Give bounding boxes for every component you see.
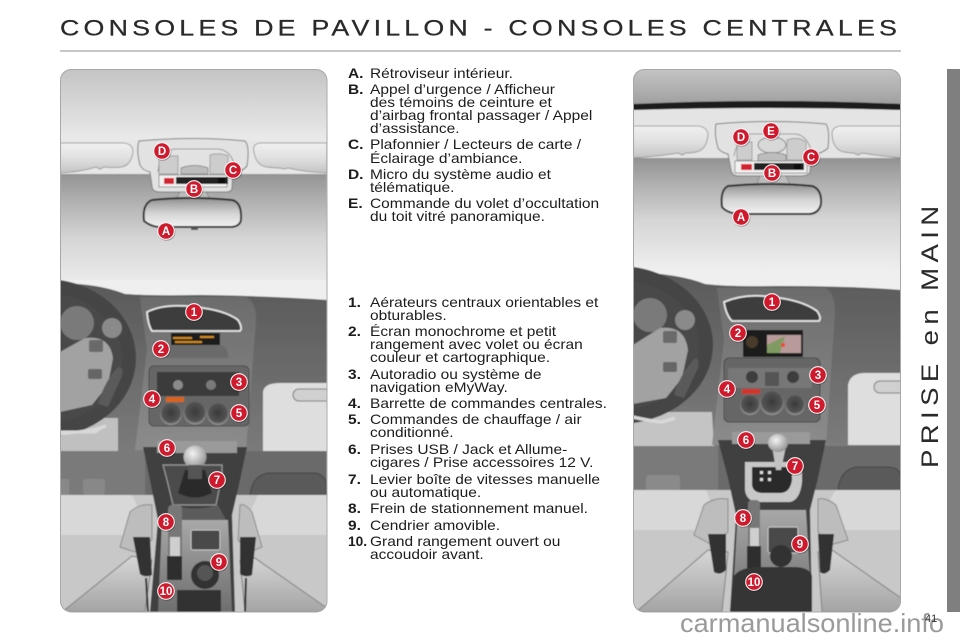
left rear-view mirror [144,192,241,230]
callout markers: right panel: B [768,168,776,180]
text block: centre console legend 1 to 10: accoudoir avant. [370,548,484,563]
callout markers: left panel: 9 [216,557,222,569]
left steering wheel [61,280,136,436]
text block: centre console legend 1 to 10: 9. [348,519,361,534]
callout markers: right panel: 6 [743,435,749,447]
right steering wheel [634,266,714,424]
text block: centre console legend 1 to 10: rangement avec volet ou écran [370,338,583,353]
callout markers: left panel: 4 [149,394,156,406]
text block: centre console legend 1 to 10: Aérateurs centraux orientables et [370,296,598,311]
text block: roof console legend A to E: du toit vitré panoramique. [370,210,545,225]
callout markers: left panel: C [229,165,237,177]
text block: roof console legend A to E: Commande du volet d’occultation [370,197,599,212]
text block: roof console legend A to E: des témoins de ceinture et [370,96,552,111]
text block: centre console legend 1 to 10: conditionné. [370,426,454,441]
panel: right car interior illustration [633,69,901,612]
right roof console [715,122,829,176]
text block: centre console legend 1 to 10 [348,296,607,563]
callout markers: right panel [719,123,827,592]
right roof glass strip [633,101,901,110]
text block: roof console legend A to E: Micro du système audio et [370,168,551,183]
title: CONSOLES DE PAVILLON - CONSOLES CENTRALES [60,17,897,41]
callout markers: left panel: 1 [191,307,198,319]
callout markers: left panel: 2 [158,344,164,356]
text block: centre console legend 1 to 10: 2. [348,325,361,340]
left centre stack [135,297,256,450]
text block: roof console legend A to E: Rétroviseur intérieur. [370,67,513,82]
callout markers: right panel: C [807,152,815,164]
callout markers: right panel: D [737,132,745,144]
callout markers: right panel: A [737,212,745,224]
callout markers: right panel: 5 [814,400,821,412]
text block: centre console legend 1 to 10: ou automatique. [370,486,481,501]
text block: roof console legend A to E: C. [348,138,364,153]
callout markers: right panel: 1 [769,297,776,309]
page number: 41 [925,613,937,625]
callout markers: left panel: 10 [160,586,172,598]
left dashboard [60,280,333,460]
text block: centre console legend 1 to 10: 5. [348,413,361,428]
text block: centre console legend 1 to 10: Prises USB / Jack et Allume- [370,443,567,458]
callout markers: right panel: 9 [797,539,803,551]
text block: centre console legend 1 to 10: cigares / Prise accessoires 12 V. [370,456,593,471]
text block: centre console legend 1 to 10: Levier boîte de vitesses manuelle [370,473,600,488]
left floor and pedals [60,451,327,499]
text block: centre console legend 1 to 10: 8. [348,502,361,517]
callout markers: left panel: 7 [214,475,220,487]
text block: roof console legend A to E: B. [348,83,364,98]
text block: roof console legend A to E: télématique. [370,181,454,196]
callout markers: right panel: 3 [815,370,821,382]
text block: roof console legend A to E: d’airbag frontal passager / Appel [370,109,592,124]
callout markers: right panel: 10 [748,577,760,589]
text block: centre console legend 1 to 10: couleur et cartographique. [370,351,550,366]
left sun visors [60,143,327,173]
text block: roof console legend A to E: Éclairage d’ambiance. [370,151,522,167]
text block: centre console legend 1 to 10: Autoradio ou système de [370,368,541,383]
callout markers: left panel: 5 [236,408,243,420]
text block: centre console legend 1 to 10: 10. [348,535,367,550]
text block: roof console legend A to E [348,67,599,225]
text block: roof console legend A to E: E. [348,197,363,212]
left tunnel and manual gear lever [143,441,247,612]
panel: left car interior illustration [60,69,328,612]
callout markers: right panel: 8 [740,513,747,525]
callout markers: right panel: 4 [724,384,731,396]
text block: centre console legend 1 to 10: obturables. [370,309,447,324]
callout markers: right panel: 2 [735,328,741,340]
callout markers: left panel: B [190,184,198,196]
side tab [947,69,960,612]
left seats [60,495,327,612]
text block: roof console legend A to E: Appel d’urgence / Afficheur [370,83,555,98]
text block: centre console legend 1 to 10: Commandes de chauffage / air [370,413,582,428]
callout markers: right panel: E [767,126,775,138]
text block: roof console legend A to E: d’assistance. [370,122,460,137]
side heading: PRISE en MAIN [918,206,944,468]
callout markers: left panel: 8 [163,517,170,529]
watermark: carmanualsonline.info [680,608,944,638]
right centre stack [712,288,835,445]
callout markers: left panel: A [162,226,170,238]
text block: centre console legend 1 to 10: 1. [348,296,361,311]
callout markers: left panel [144,143,248,601]
right dashboard [633,270,914,450]
callout markers: left panel: D [158,146,166,158]
left centre console [158,505,232,612]
text block: roof console legend A to E: Plafonnier / Lecteurs de carte / [370,138,582,153]
callout markers: left panel: 6 [164,443,170,455]
left roof console [138,138,248,192]
text block: centre console legend 1 to 10: 3. [348,368,361,383]
text block: centre console legend 1 to 10: navigation eMyWay. [370,381,508,396]
text block: centre console legend 1 to 10: 4. [348,397,361,412]
text block: centre console legend 1 to 10: 6. [348,443,361,458]
text block: centre console legend 1 to 10: 7. [348,473,361,488]
callout markers: left panel: 3 [236,377,242,389]
right sun visors [633,126,901,158]
right rear-view mirror [722,176,821,214]
right centre console and armrest [730,500,812,612]
right seats [633,490,901,612]
text block: centre console legend 1 to 10: Barrette de commandes centrales. [370,397,607,412]
text block: centre console legend 1 to 10: Frein de stationnement manuel. [370,502,588,517]
text block: centre console legend 1 to 10: Cendrier amovible. [370,519,500,534]
right tunnel and automatic gear selector [718,432,826,612]
text block: roof console legend A to E: A. [348,67,364,82]
text block: centre console legend 1 to 10: Grand rangement ouvert ou [370,535,560,550]
callout markers: right panel: 7 [792,461,798,473]
text block: centre console legend 1 to 10: Écran monochrome et petit [370,324,556,340]
right floor and pedals [633,446,901,494]
text block: roof console legend A to E: D. [348,168,364,183]
